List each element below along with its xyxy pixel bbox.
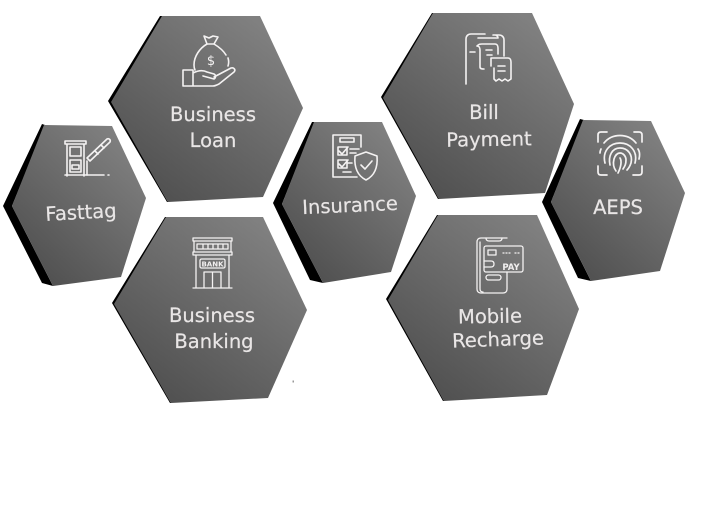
icon: money bag in hand: $: [207, 54, 215, 69]
panel: Mobile Recharge: PAY: [502, 263, 521, 273]
icon: phone with receipts: [466, 34, 511, 84]
panel: Business Loan: [108, 16, 303, 202]
label: Mobile Recharge: Recharge: [452, 326, 544, 353]
label: Mobile Recharge: [452, 304, 544, 353]
label: Business Loan: Loan: [190, 129, 236, 152]
label: Bill Payment: Bill: [469, 101, 499, 124]
label: Bill Payment: [446, 101, 532, 152]
panel: Insurance: [273, 122, 416, 283]
speck: [292, 380, 294, 382]
icon: toll barrier: [65, 139, 110, 176]
label: Fasttag: Fasttag: [45, 199, 117, 226]
panel: Bill Payment: [381, 13, 574, 199]
panel: Mobile Recharge: [386, 215, 579, 401]
label: Business Loan: [170, 103, 256, 152]
panel: Business Banking: BANK: [201, 260, 224, 268]
label: Mobile Recharge: Mobile: [458, 304, 522, 329]
icon: checklist and shield: [333, 135, 377, 180]
panel: Business Banking: [112, 217, 307, 403]
label: Business Loan: Business: [170, 103, 256, 126]
panel: AEPS: [542, 119, 685, 281]
icon: money bag in hand: [183, 36, 235, 86]
icon: bank building: [193, 238, 232, 288]
label: Insurance: Insurance: [302, 192, 398, 219]
label: Business Banking: Banking: [174, 330, 254, 353]
label: AEPS: AEPS: [593, 196, 643, 219]
label: Bill Payment: Payment: [446, 127, 532, 152]
icon: fingerprint scan: [598, 132, 642, 175]
panel: Fasttag: [3, 124, 146, 286]
label: Business Banking: [169, 304, 255, 353]
icon: phone with pay card: [477, 238, 523, 293]
label: Business Banking: Business: [169, 304, 255, 327]
